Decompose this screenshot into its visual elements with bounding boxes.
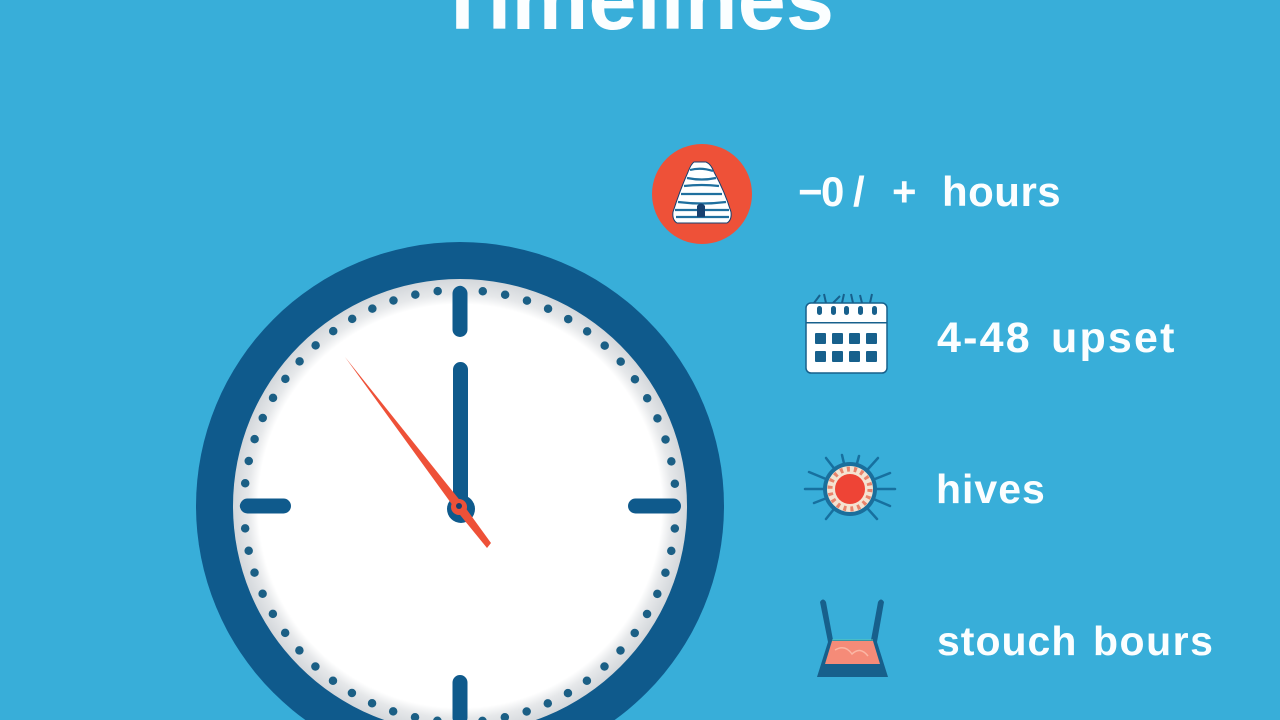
- hour ticks: [240, 286, 681, 720]
- minute dots: [244, 290, 676, 720]
- icon: hives spot: [805, 455, 895, 519]
- clock face: [233, 279, 687, 720]
- label: /: [853, 168, 865, 215]
- label: hives: [936, 466, 1046, 512]
- icon: tray: [817, 600, 888, 677]
- item: stouch bours: [817, 600, 1214, 677]
- label: −: [798, 168, 823, 215]
- clock: [196, 242, 724, 720]
- clock bezel: [196, 242, 724, 720]
- second hand: [345, 357, 491, 548]
- item: hives: [805, 455, 1046, 519]
- label: stouch: [937, 618, 1077, 664]
- clock hub: [447, 495, 475, 523]
- label: 4-48: [937, 314, 1032, 362]
- icon: beehive: [652, 144, 752, 244]
- item: 4-48 upset: [806, 294, 1177, 373]
- label: 0: [821, 168, 845, 215]
- item: 0 to 4 hours: [652, 144, 1061, 244]
- icon: calendar: [806, 294, 887, 373]
- label: upset: [1051, 314, 1177, 362]
- label: +: [892, 168, 917, 215]
- label: bours: [1093, 618, 1214, 664]
- label: hours: [942, 168, 1061, 215]
- minute hand: [453, 362, 468, 508]
